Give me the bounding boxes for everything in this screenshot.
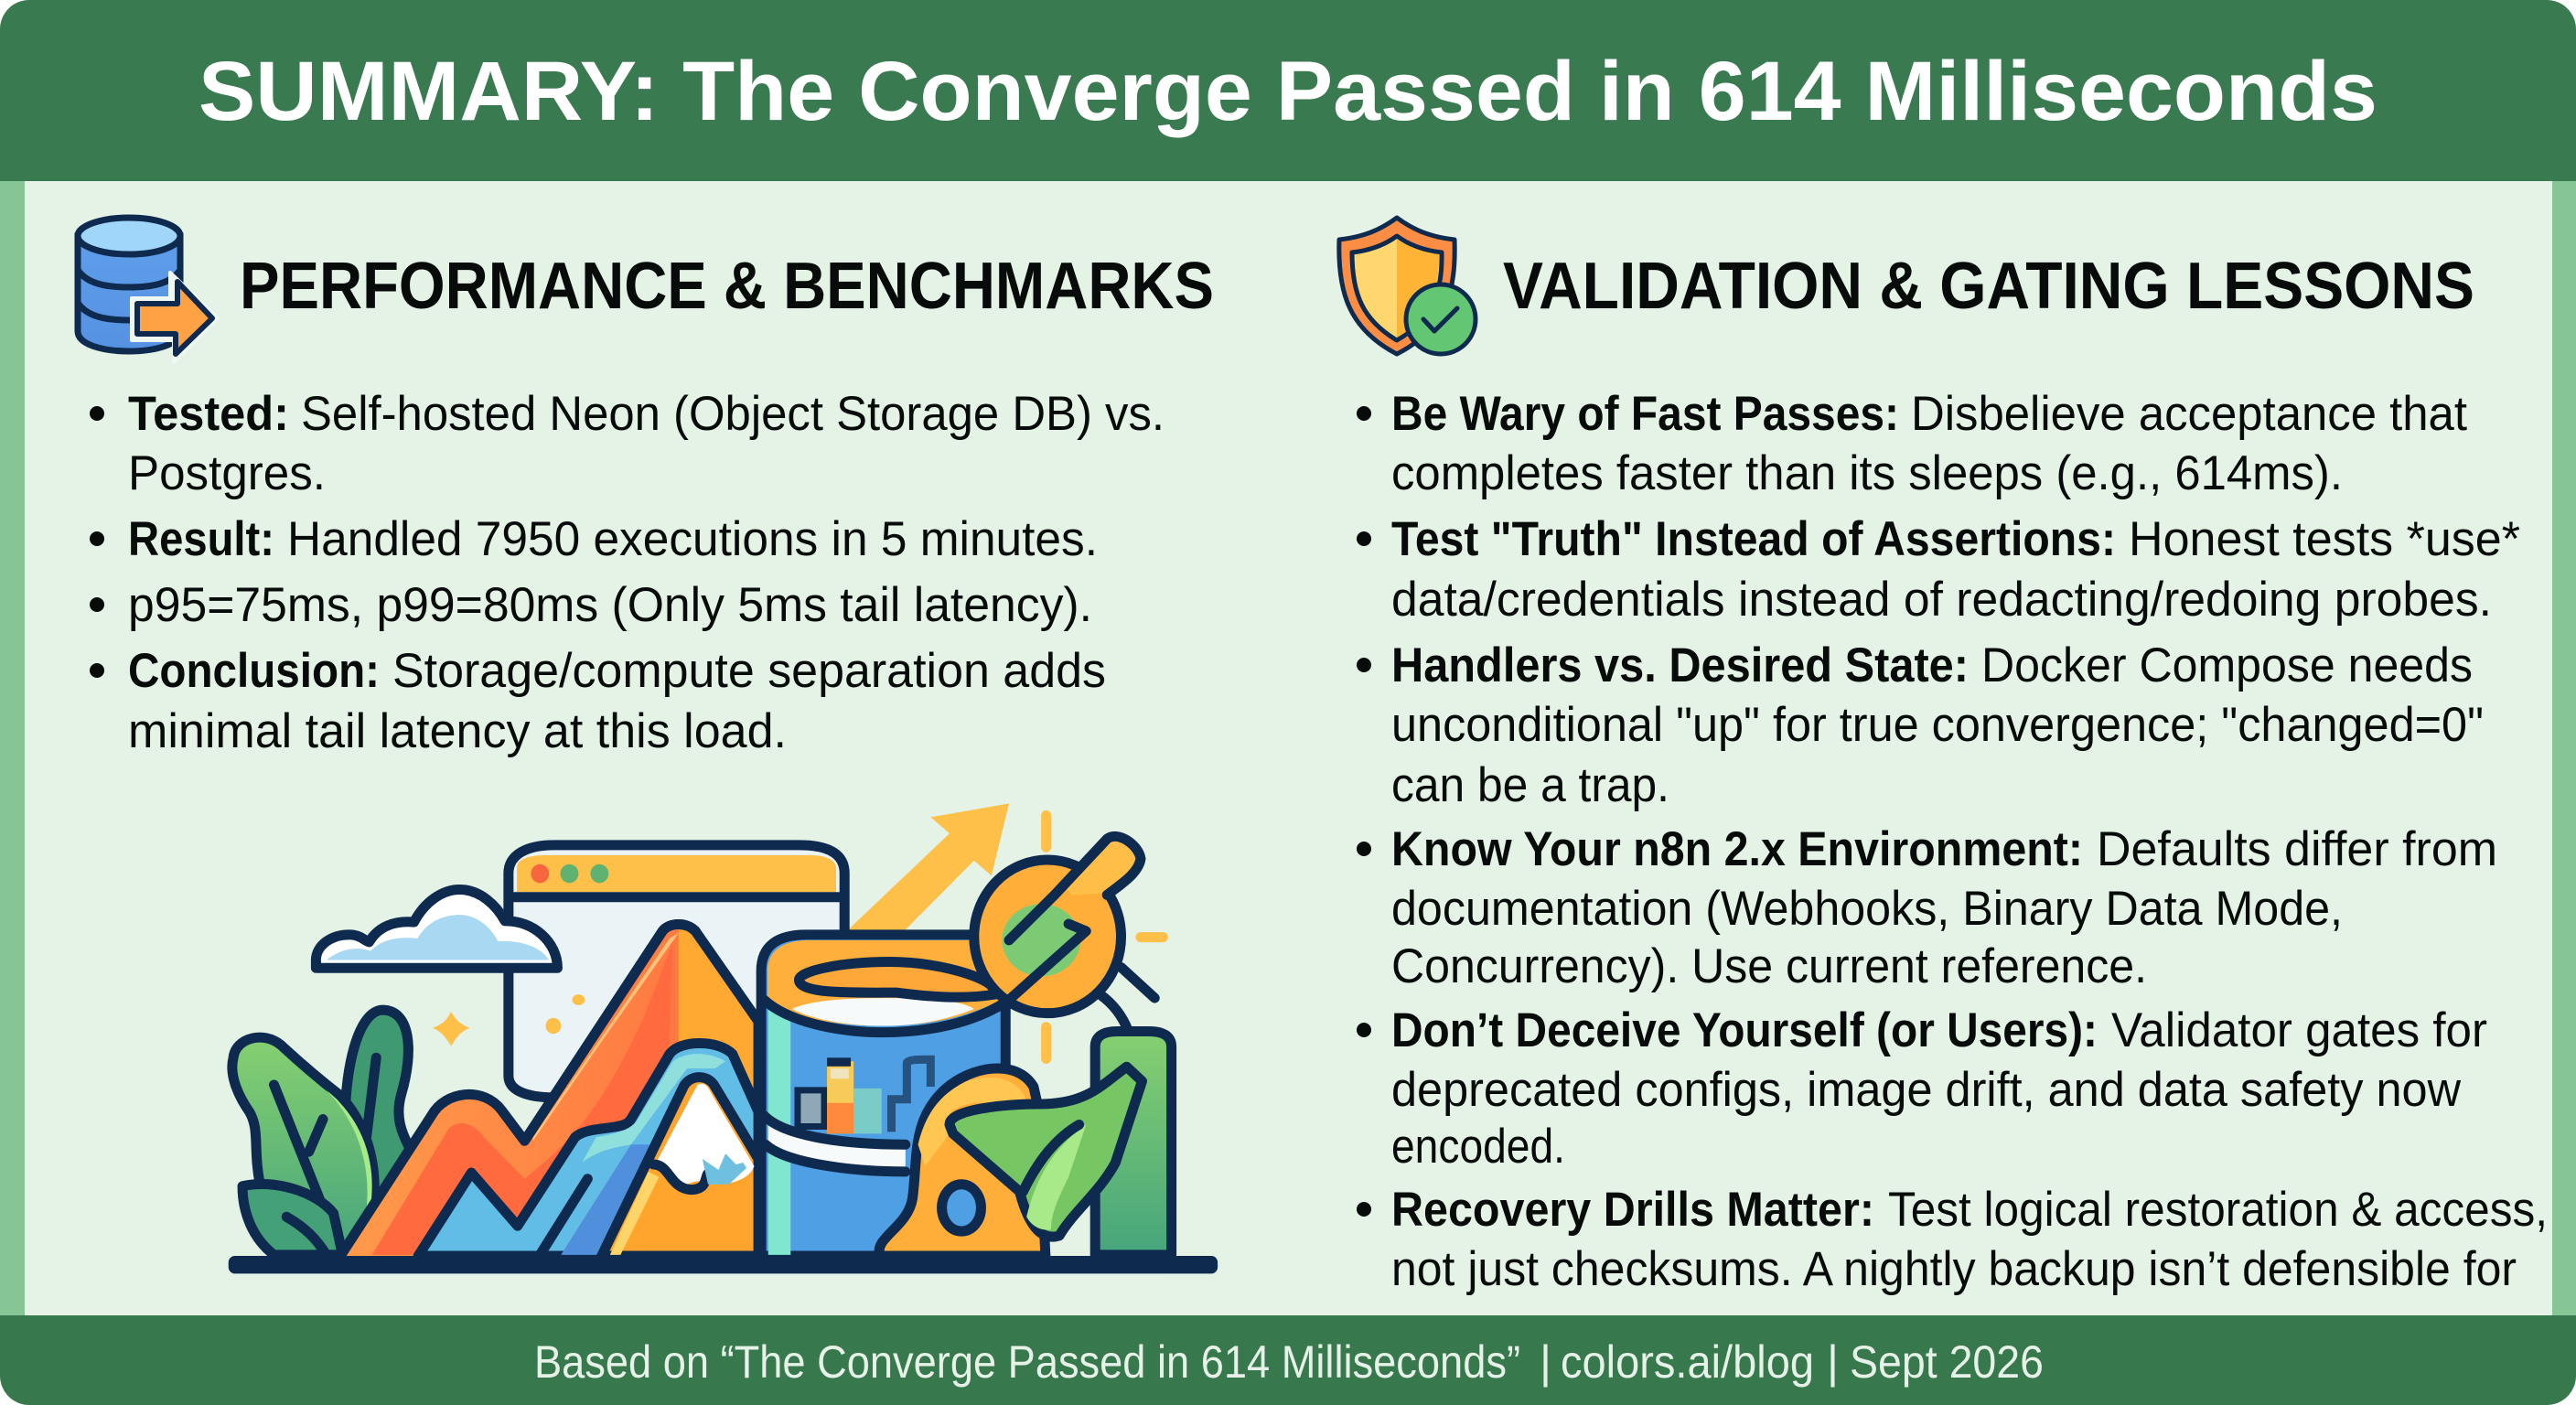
footer source line: Based on “The Converge Passed in 614 Milliseconds” (534, 1336, 1520, 1388)
big leaf (232, 1037, 374, 1255)
bullet list: performance: p95=75ms, p99=80ms (Only 5ms tail latency). (128, 578, 1092, 632)
sparkle (432, 1012, 470, 1046)
bullet list: lessons: can be a trap. (1391, 758, 1669, 812)
bullet list: lessons: Test "Truth" Instead of Assertions: (1391, 512, 2116, 566)
panel: validation and gating lessons (1339, 218, 2548, 1296)
bullet list: lessons (1357, 387, 2548, 1296)
bullet list: performance (90, 387, 1165, 758)
bullet list: performance: Result: (128, 512, 274, 566)
bullet list: performance: Tested: (128, 387, 289, 441)
ground line (229, 1256, 1218, 1273)
bullet list: lessons: Don’t Deceive Yourself (or Users): (1391, 1003, 2098, 1057)
database cylinder (761, 935, 1005, 1256)
white band (768, 1121, 906, 1167)
bullet list: performance: minimal tail latency at this load. (128, 704, 787, 758)
tall green bar (1095, 1031, 1172, 1255)
heading: performance and benchmarks: PERFORMANCE & BENCHMARKS (240, 250, 1214, 323)
snowy peak (602, 1078, 758, 1256)
orange peak (524, 925, 758, 1255)
bars (798, 1090, 824, 1126)
icon: shield with check (1339, 218, 1476, 354)
bullet list: performance: Storage/compute separation adds (392, 644, 1106, 698)
bullet list: lessons: encoded. (1391, 1120, 1565, 1174)
bullet list: lessons: not just checksums. A nightly backup isn’t defensible for (1391, 1242, 2517, 1296)
green leaf (950, 1067, 1142, 1237)
footer source line: | (1827, 1336, 1839, 1388)
right side strip (2552, 174, 2576, 1326)
heading: validation and gating lessons: VALIDATION & GATING LESSONS (1503, 250, 2474, 323)
bullet list: lessons: Concurrency). Use current reference. (1391, 939, 2147, 993)
panel: performance and benchmarks (78, 218, 1218, 1273)
bullet list: lessons: completes faster than its sleeps (e.g., 614ms). (1391, 446, 2343, 500)
illustration: data landscape (229, 803, 1218, 1273)
bullet list: lessons: Validator gates for (2111, 1003, 2487, 1057)
bullet list: lessons: unconditional "up" for true convergence; "changed=0" (1391, 698, 2484, 752)
blue mountain (418, 1044, 758, 1256)
cloud (316, 889, 557, 968)
bullet list: lessons: Test logical restoration & access, (1888, 1183, 2548, 1237)
bullet list: performance: Handled 7950 executions in 5 minutes. (287, 512, 1098, 566)
bullet list: lessons: Know Your n8n 2.x Environment: (1391, 822, 2083, 876)
tall leaf (346, 1010, 411, 1217)
magnifier with handle and rays (974, 815, 1163, 1059)
footer source line: colors.ai/blog (1561, 1336, 1814, 1388)
bullet list: lessons: documentation (Webhooks, Binary Data Mode, (1391, 882, 2343, 936)
orange blob (879, 1068, 1046, 1256)
bullet list: lessons: Disbelieve acceptance that (1911, 387, 2467, 441)
bullet list: lessons: deprecated configs, image drift, and data safety now (1391, 1063, 2462, 1117)
footer source line: | (1540, 1336, 1551, 1388)
bullet list: lessons: Honest tests *use* (2129, 512, 2520, 566)
growth arrow (847, 803, 1009, 931)
bullet list: lessons: Handlers vs. Desired State: (1391, 638, 1969, 692)
red zigzag mountain (340, 925, 695, 1256)
bullet list: lessons: Defaults differ from (2097, 822, 2497, 876)
bullet list: performance: Conclusion: (128, 644, 380, 698)
bullet list: lessons: Be Wary of Fast Passes: (1391, 387, 1899, 441)
browser window (509, 845, 844, 1098)
footer source line: Sept 2026 (1850, 1336, 2044, 1388)
bullet list: lessons: data/credentials instead of redacting/redoing probes. (1391, 573, 2492, 627)
bullet list: performance: Self-hosted Neon (Object Storage DB) vs. (301, 387, 1165, 441)
small leaf (242, 1184, 342, 1255)
footer banner (0, 1315, 2576, 1405)
bullet list: performance: Postgres. (128, 446, 326, 500)
bullet list: lessons: Docker Compose needs (1981, 638, 2473, 692)
bullet list: lessons: Recovery Drills Matter: (1391, 1183, 1874, 1237)
icon: database with arrow (78, 218, 218, 362)
title: SUMMARY: The Converge Passed in 614 Milliseconds (199, 45, 2377, 138)
left side strip (0, 174, 25, 1326)
title banner (0, 0, 2576, 181)
